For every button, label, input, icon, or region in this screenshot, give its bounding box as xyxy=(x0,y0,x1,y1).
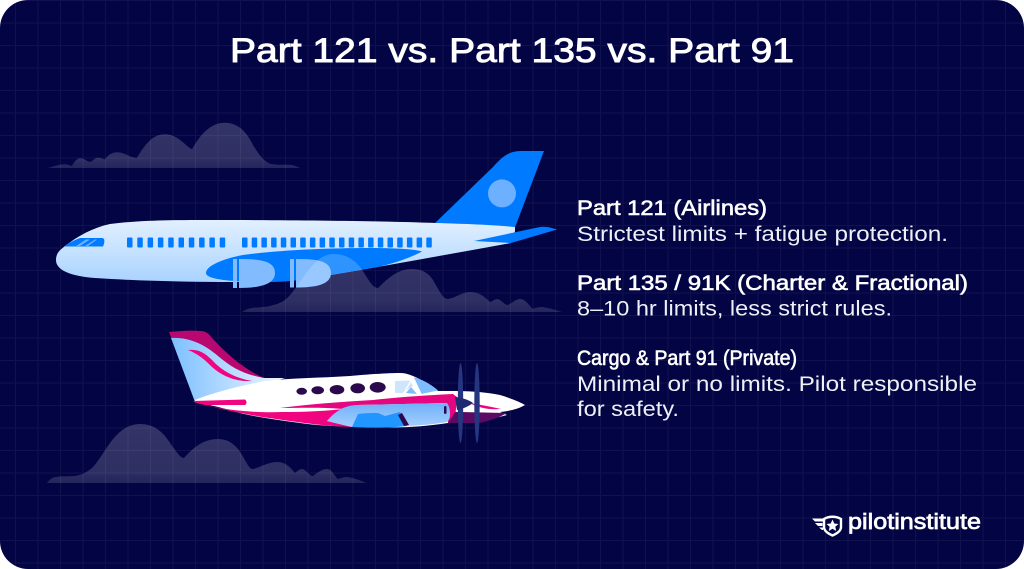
icon: winged shield xyxy=(812,517,841,536)
wing strut xyxy=(398,413,409,426)
text block: Cargo and Part 91 xyxy=(577,347,977,421)
spinner xyxy=(455,397,473,410)
heading: Part 121 (Airlines) xyxy=(577,197,767,220)
engine one xyxy=(233,259,275,288)
tail stripe xyxy=(188,350,252,381)
nose underside xyxy=(448,412,507,423)
engine vent xyxy=(444,406,446,414)
engine underside xyxy=(352,412,407,428)
cabin windows xyxy=(127,238,432,248)
windshield xyxy=(64,238,104,246)
engine two xyxy=(290,259,331,288)
fuselage xyxy=(195,373,525,427)
belly stripe xyxy=(205,405,352,427)
fuselage xyxy=(56,220,515,282)
title: Part 121 vs. Part 135 vs. Part 91 xyxy=(230,32,794,70)
heading: Part 135 / 91K (Charter & Fractional) xyxy=(577,272,968,295)
tail stripe on fuselage xyxy=(193,400,246,405)
airliner xyxy=(56,151,557,288)
description: Strictest limits + fatigue protection. xyxy=(577,222,948,246)
description line two: for safety. xyxy=(577,397,679,421)
wing xyxy=(327,403,450,427)
cloud: middle xyxy=(242,254,562,312)
wordmark: pilotinstitute xyxy=(848,509,981,534)
windshield highlight xyxy=(76,240,97,246)
propellers xyxy=(458,363,480,443)
logo xyxy=(812,509,981,536)
text block: Part 135 / 91K xyxy=(577,272,968,320)
tail fin top xyxy=(169,331,262,400)
cabin windows xyxy=(296,382,386,395)
heading: Cargo & Part 91 (Private) xyxy=(577,347,797,370)
small twin-prop plane xyxy=(169,331,525,443)
description: 8–10 hr limits, less strict rules. xyxy=(577,296,892,320)
nose stripe xyxy=(470,403,501,409)
description line one: Minimal or no limits. Pilot responsible xyxy=(577,372,977,396)
tail emblem xyxy=(488,179,516,207)
tail fin xyxy=(171,338,285,402)
cloud: bottom xyxy=(47,424,367,483)
cockpit windows xyxy=(395,377,438,394)
cloud: top left xyxy=(48,123,300,168)
wing xyxy=(206,248,422,282)
text block: Part 121 xyxy=(577,197,948,246)
horizontal stabilizer xyxy=(474,227,557,243)
tail fin xyxy=(434,151,544,230)
upper pink band xyxy=(280,394,457,423)
